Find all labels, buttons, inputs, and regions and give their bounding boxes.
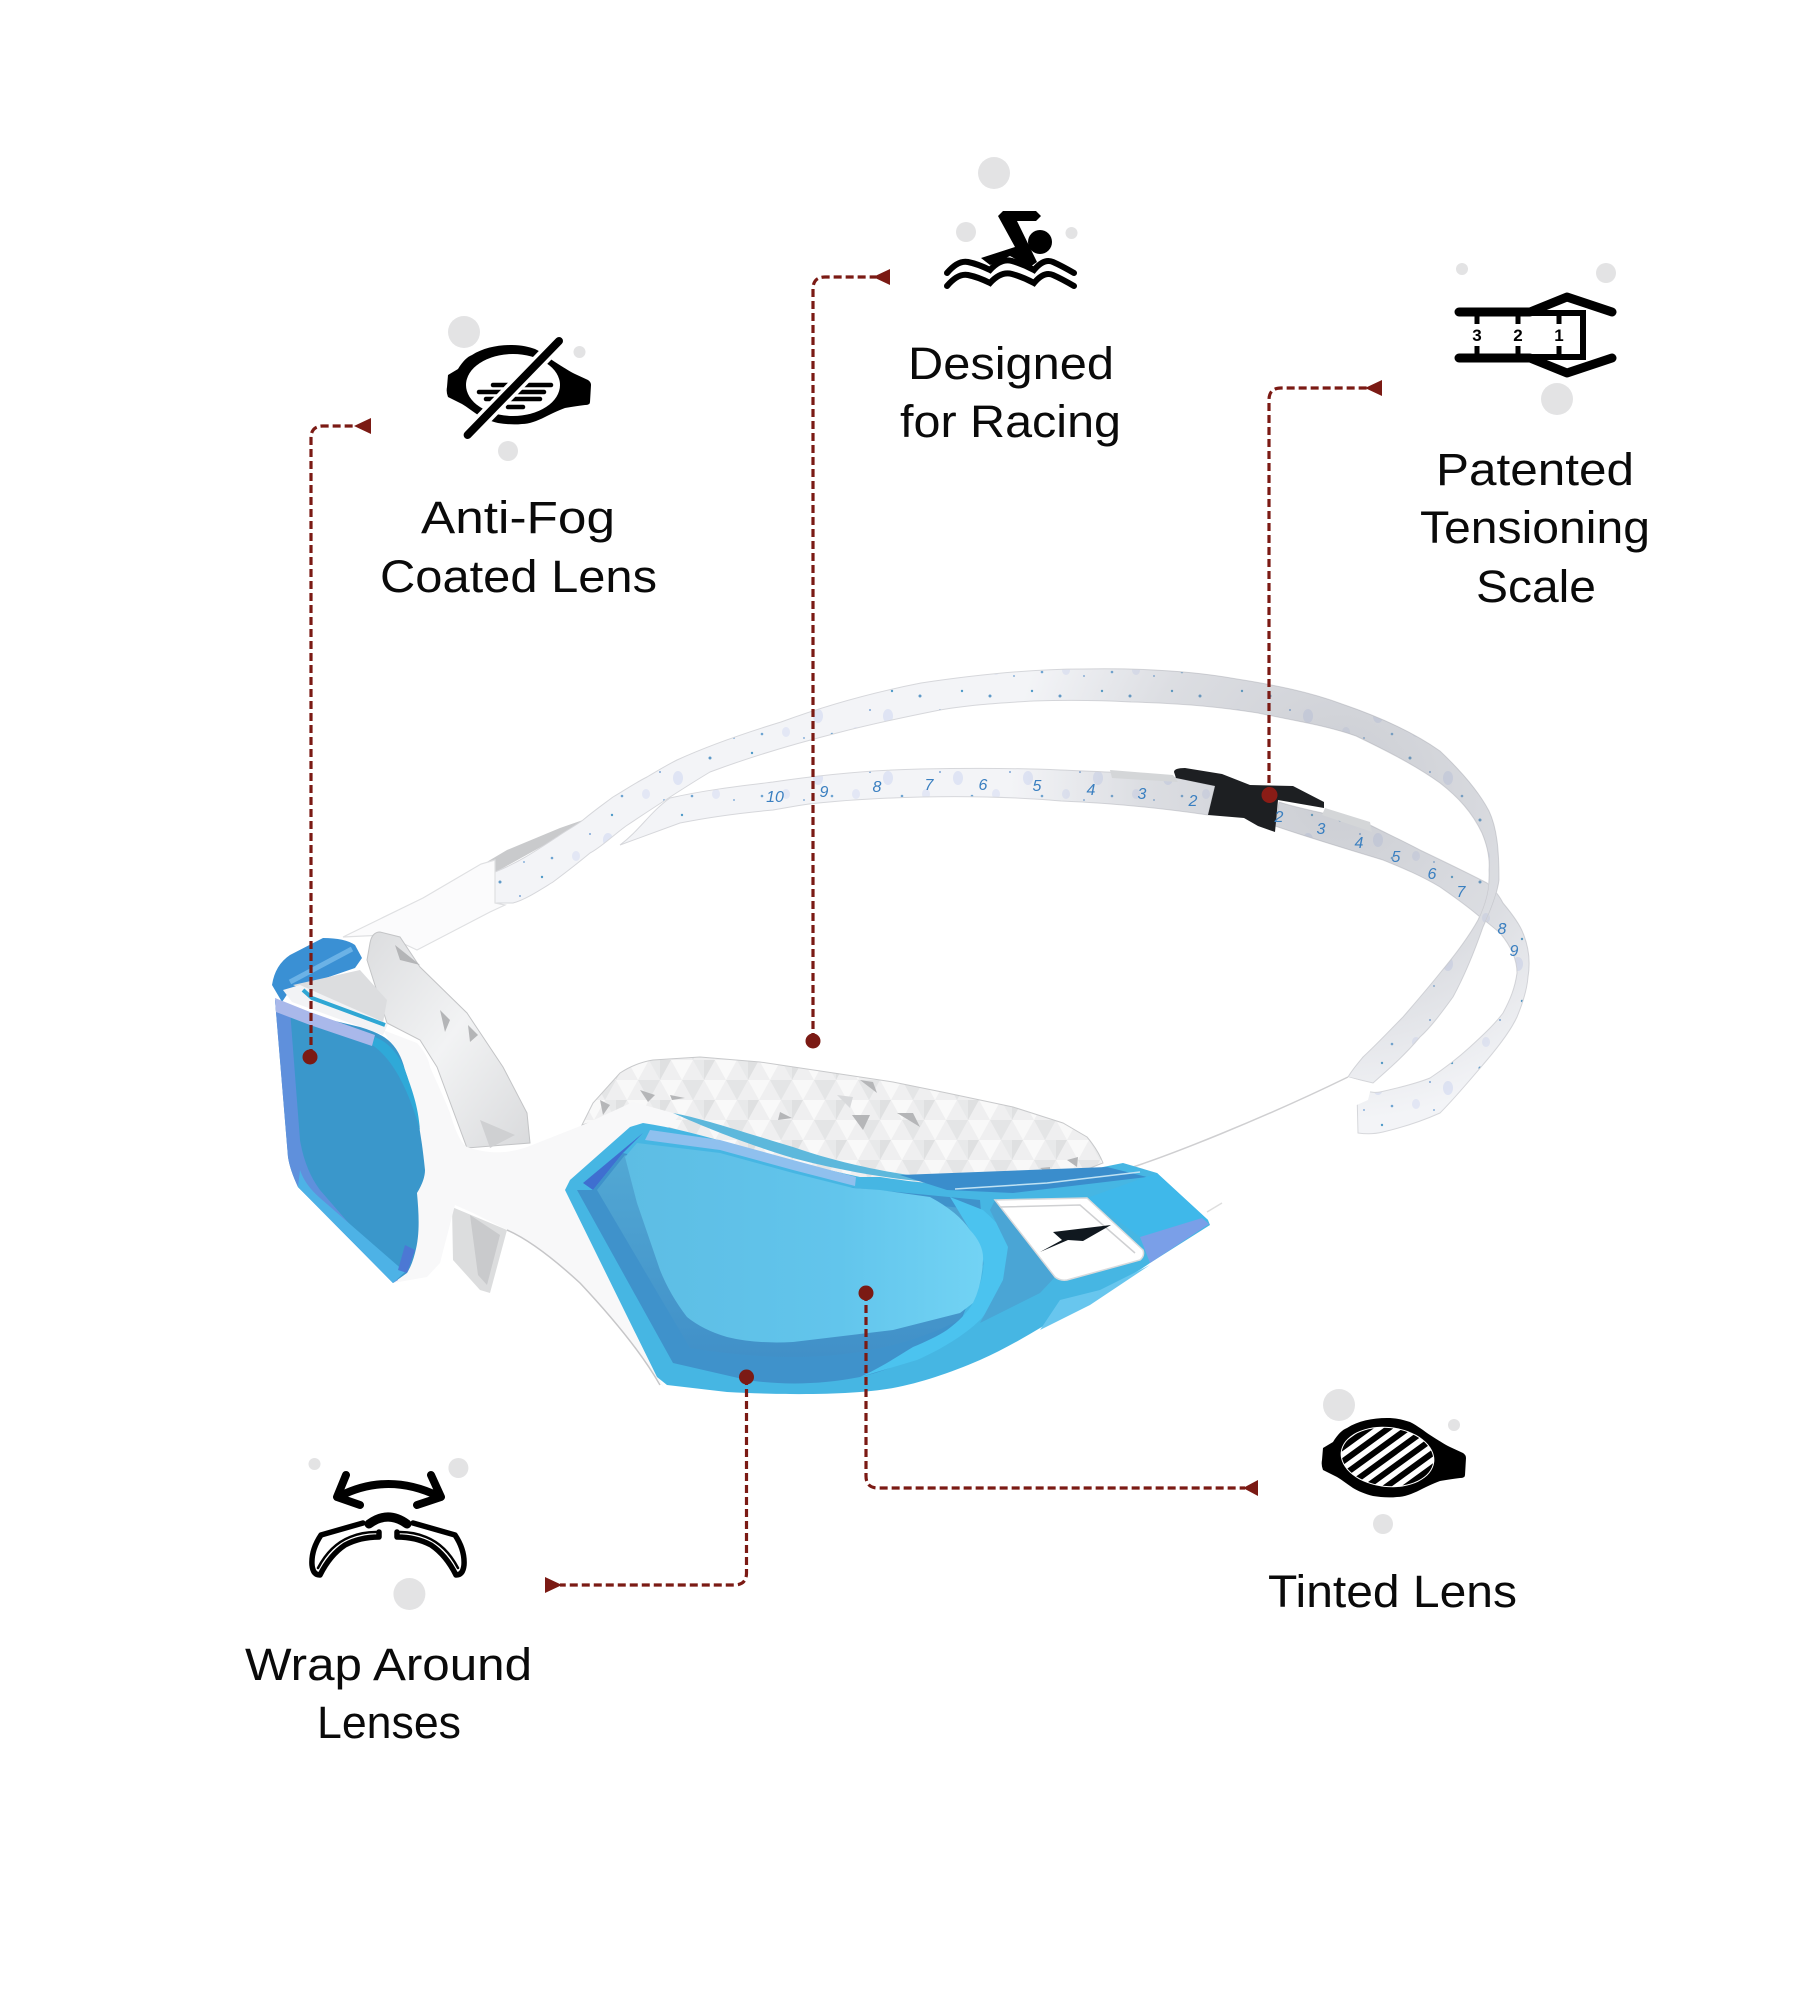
strap numbers: 9 — [820, 784, 829, 801]
icon: scale strap: 1 — [1554, 326, 1564, 345]
strap numbers: 7 — [1457, 884, 1467, 901]
label: Coated Lens — [380, 551, 657, 602]
bubbles — [1456, 263, 1616, 415]
label — [1420, 444, 1650, 612]
label: Lenses — [317, 1697, 461, 1748]
connector: tinted lens — [858, 1286, 1258, 1496]
icon: fogged goggle lens — [447, 341, 591, 435]
main lens — [625, 1143, 983, 1342]
buckle — [1174, 768, 1324, 832]
connector: wrap around — [545, 1370, 754, 1593]
label: for Racing — [900, 396, 1121, 447]
buckle tabs — [1110, 770, 1372, 832]
strap numbers: 7 — [925, 777, 935, 794]
bubbles — [308, 1458, 468, 1610]
label: Scale — [1476, 561, 1596, 612]
strap numbers: 10 — [766, 789, 784, 806]
feature: anti-fog coated lens — [380, 316, 657, 602]
front seal — [582, 1057, 1103, 1190]
strap numbers: 9 — [1510, 943, 1519, 960]
icon: wrap around goggle — [312, 1475, 464, 1575]
icon: scale strap: 3 — [1472, 326, 1482, 345]
strap underside — [480, 820, 583, 880]
label: Tensioning — [1420, 502, 1650, 553]
strap numbers — [766, 777, 1519, 960]
lower seal — [452, 1207, 507, 1293]
strap numbers: 8 — [1498, 921, 1507, 938]
icon: swimmer — [947, 211, 1074, 286]
label: Tinted Lens — [1268, 1566, 1517, 1617]
white frame — [383, 1030, 680, 1390]
connector: designed for racing — [806, 269, 890, 1048]
under-tab panel — [980, 1200, 1055, 1323]
left seal — [367, 932, 530, 1148]
front lens rim — [565, 1123, 1210, 1394]
label — [900, 338, 1121, 447]
connector: tensioning scale — [1262, 380, 1382, 803]
strap numbers: 5 — [1033, 778, 1042, 795]
strap: lower scale strap, left — [620, 768, 1215, 845]
speedo mark — [1040, 1225, 1111, 1252]
feature: wrap around lenses — [245, 1458, 532, 1748]
strap numbers: 6 — [1428, 866, 1437, 883]
strap numbers: 3 — [1138, 786, 1147, 803]
connector: anti-fog — [302, 418, 371, 1064]
bubbles — [1323, 1389, 1460, 1534]
left lens — [272, 938, 425, 1283]
label — [380, 492, 657, 602]
strap numbers: 6 — [979, 777, 988, 794]
logo tab — [995, 1198, 1144, 1280]
strap numbers: 2 — [1274, 809, 1284, 826]
label: Patented — [1436, 444, 1634, 495]
strap: lower scale strap, right — [1275, 802, 1529, 1134]
label: Anti-Fog — [421, 492, 615, 543]
front lens — [577, 1130, 1209, 1383]
blue streak above lens — [673, 1113, 930, 1182]
goggles illustration — [272, 669, 1529, 1394]
icon: scale strap: 2 — [1513, 326, 1523, 345]
label — [245, 1639, 532, 1748]
icon: scale strap — [1459, 297, 1612, 373]
strap: upper strap — [495, 669, 1499, 1083]
feature: patented tensioning scale — [1420, 263, 1650, 612]
strap numbers: 4 — [1355, 835, 1364, 852]
right arm — [1130, 1077, 1372, 1235]
strap numbers: 3 — [1317, 821, 1326, 838]
feature: tinted lens — [1268, 1380, 1517, 1617]
strap numbers: 2 — [1188, 793, 1198, 810]
label: Wrap Around — [245, 1639, 532, 1690]
bubbles — [448, 316, 586, 461]
icon: tinted goggle lens — [1322, 1418, 1466, 1498]
bubbles — [956, 157, 1078, 242]
left arm — [343, 860, 505, 950]
strap numbers: 5 — [1392, 849, 1401, 866]
lavender highlight — [645, 1130, 856, 1186]
strap numbers: 8 — [873, 779, 882, 796]
strap numbers: 4 — [1087, 782, 1096, 799]
feature: designed for racing — [900, 157, 1121, 447]
label: Designed — [908, 338, 1114, 389]
bright ring — [860, 1197, 1008, 1377]
